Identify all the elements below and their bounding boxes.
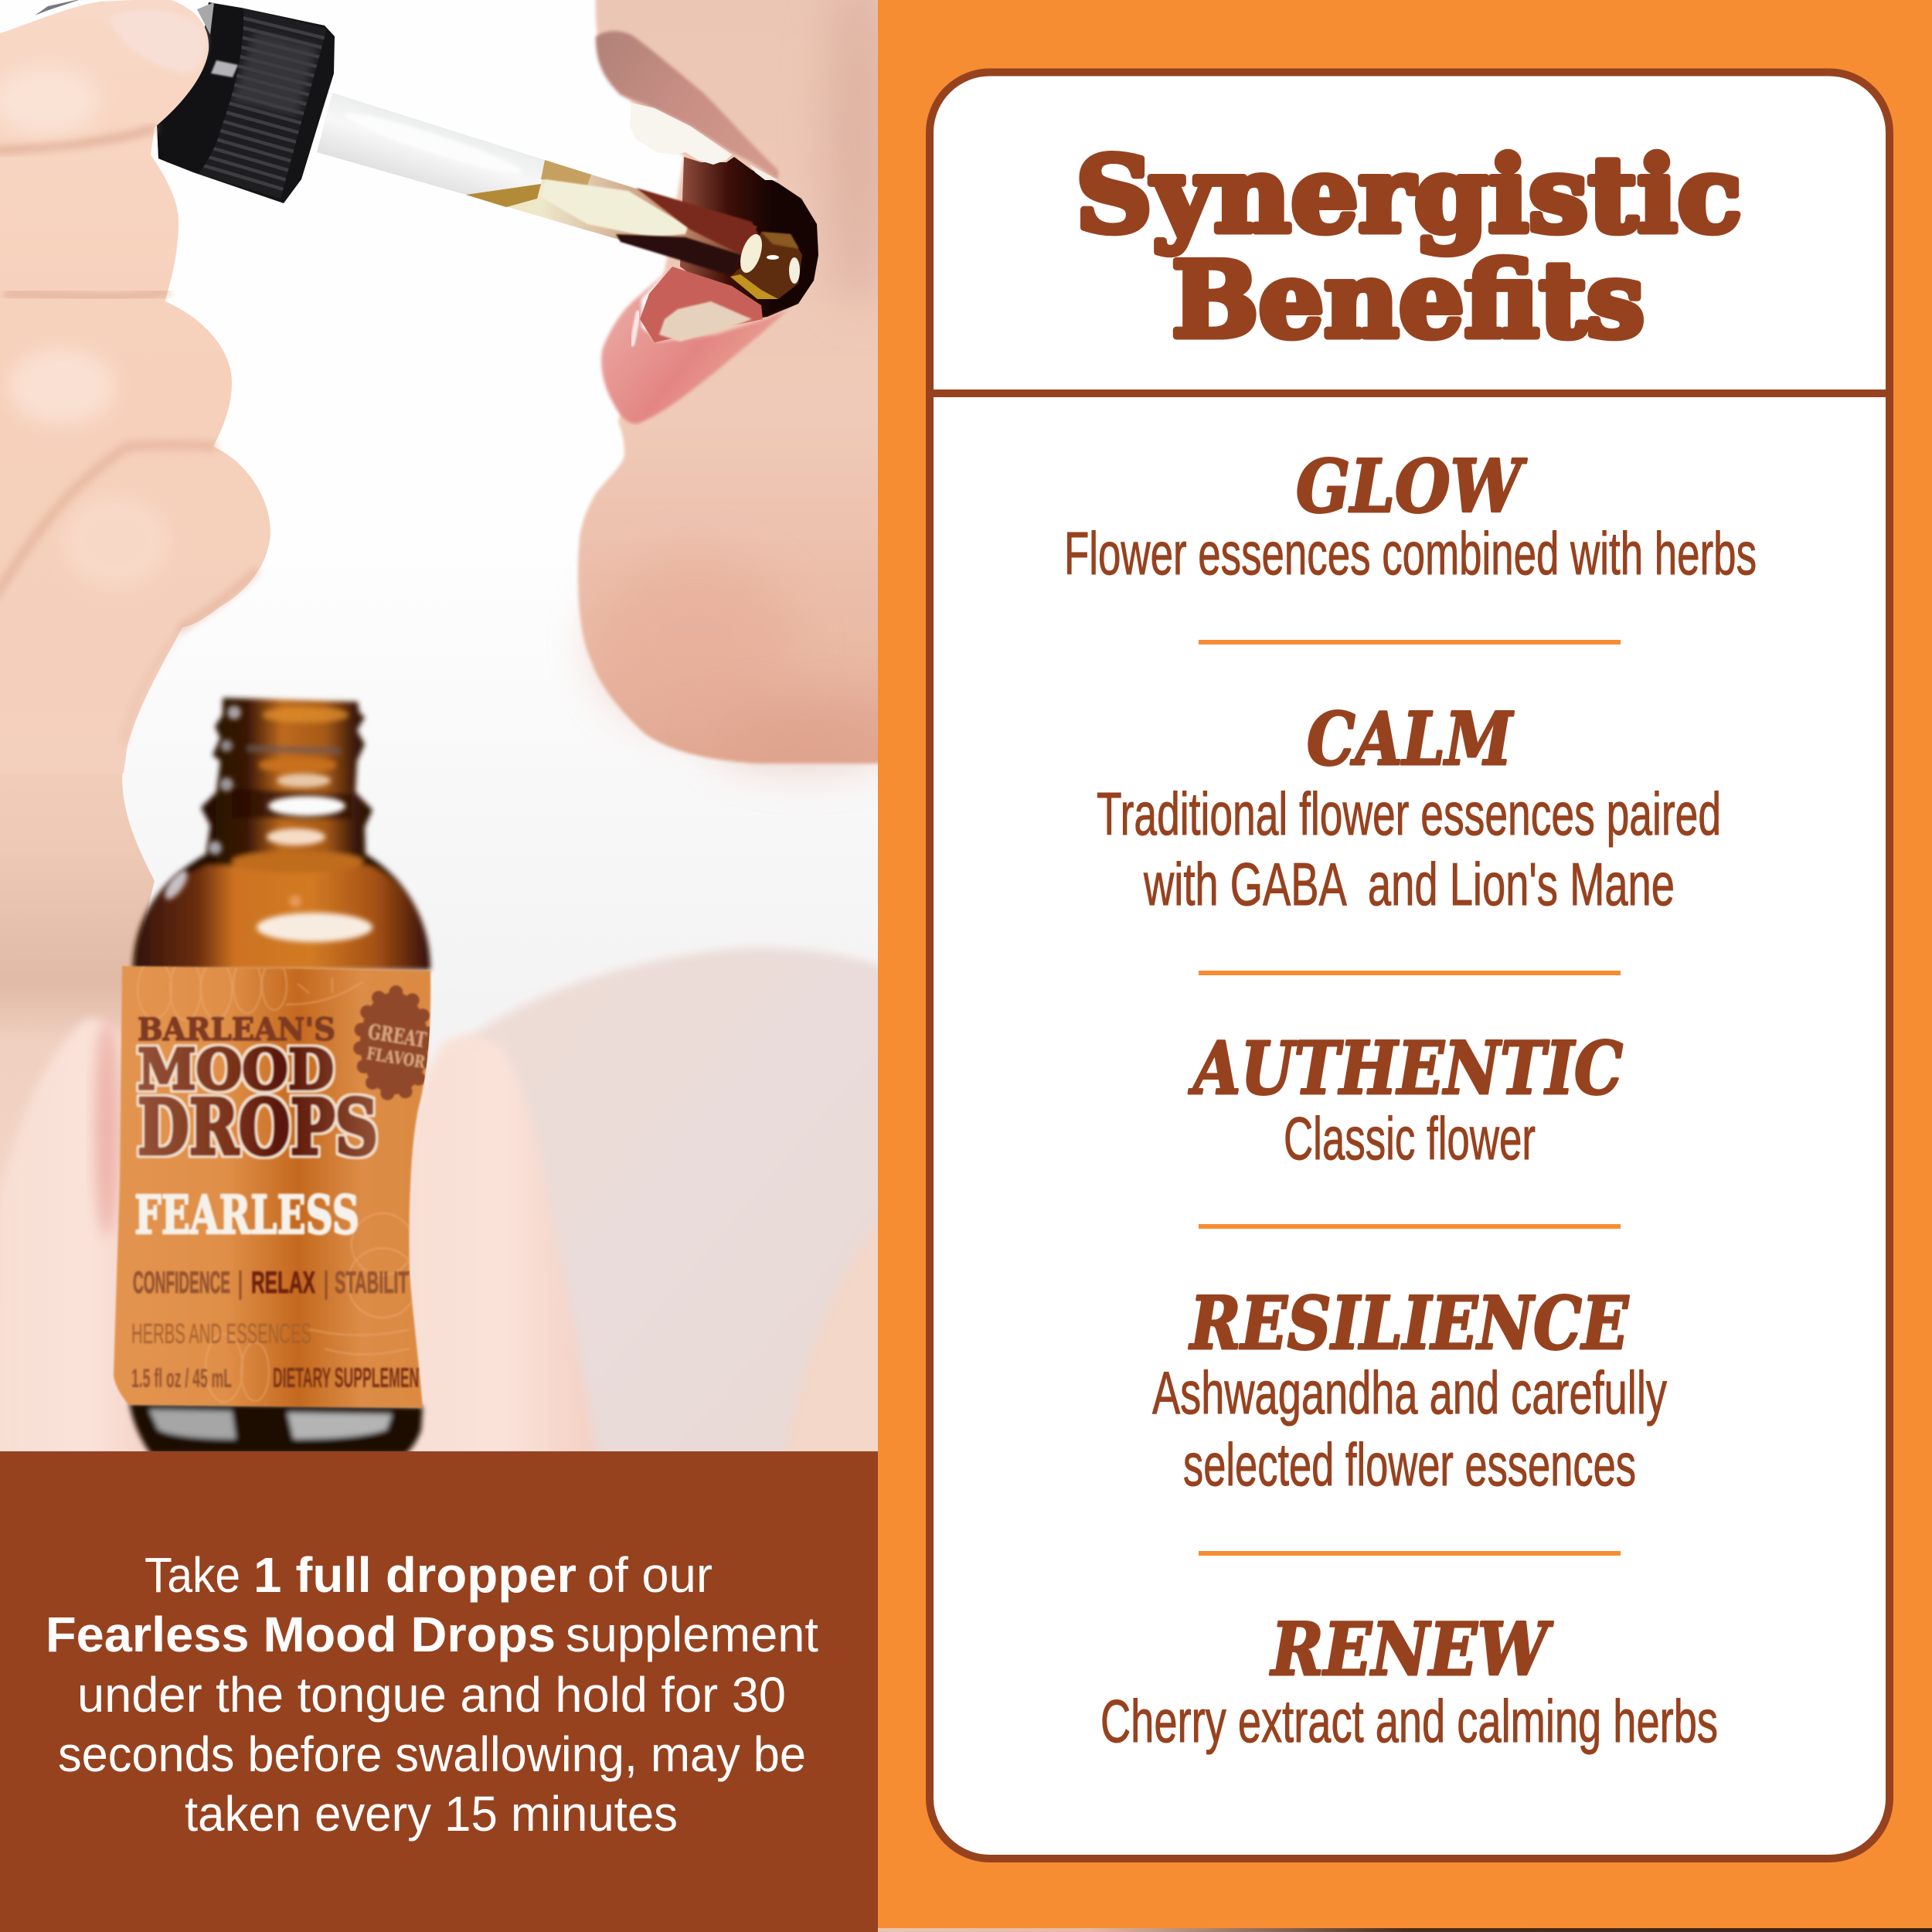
text block: directions: taken every 15 minutes [185,1786,678,1842]
benefit words: | [238,1266,243,1300]
dropper [157,2,802,299]
mouth interior [680,157,818,319]
benefit: authentic: AUTHENTIC [1188,1026,1623,1111]
text block: directions: Fearless Mood Drops [46,1607,556,1662]
benefit words: RELAX [251,1266,315,1300]
panel: product photo: DIETARY SUPPLEMENT [273,1362,427,1393]
panel: product photo [0,0,899,1478]
benefit: resilience [1152,1281,1667,1498]
finger highlights [0,66,100,135]
flavor: fearless: FEARLESS [134,1185,359,1247]
text block: directions: seconds before swallowing, may be [58,1726,806,1782]
finger shadows [0,123,261,657]
hand holding dropper [0,0,270,773]
herbs line: HERBS AND ESSENCES [131,1318,311,1349]
benefit: renew [1100,1607,1718,1755]
panel: directions background [0,1451,878,1932]
label leaf pattern [138,957,417,1402]
benefit words: CONFIDENCE [133,1266,230,1300]
oil highlight [541,179,688,237]
oil dark bands [636,188,760,255]
fingers holding bottle [0,1019,598,1478]
benefit: resilience: selected flower essences [1183,1430,1636,1498]
bottle base [129,1403,423,1454]
benefit: authentic [1188,1026,1623,1172]
bottle neck and shoulders [133,698,430,970]
benefit: calm [1097,697,1721,918]
text block: directions: supplement [566,1607,818,1662]
shoulder [473,945,878,1451]
heading: synergistic benefits: Benefits [1172,239,1645,361]
panel: benefits card [930,73,1889,1859]
benefit: glow [1064,444,1757,587]
thumb nail [108,9,206,73]
benefit: calm: with GABA and Lion's Mane [1143,850,1675,918]
dropper tip [730,232,802,299]
heading: synergistic benefits [1076,134,1742,361]
bottle highlights [161,706,372,942]
brand name: BARLEAN'S [138,1012,335,1048]
product name: drops: DROPS [138,1083,378,1172]
mouth [596,31,818,423]
heading: synergistic benefits: Synergistic [1076,134,1742,256]
benefit: renew: RENEW [1269,1607,1553,1692]
amber bottle [114,698,430,1454]
face with chin [578,0,896,765]
cap ribs [196,17,325,189]
text block: directions: Take [145,1547,240,1603]
panel: orange background [878,0,1932,1932]
size: 1.5 fl oz / 45 mL [131,1364,232,1393]
badge: great flavor [360,992,428,1094]
text block: directions: 1 full dropper [253,1547,577,1603]
text block: directions: under the tongue and hold for 30 [77,1667,786,1723]
glass tube, empty section [317,93,545,195]
benefit: resilience: Ashwagandha and carefully [1152,1359,1667,1427]
benefit words: STABILITY [335,1266,420,1300]
badge: great flavor: GREAT [366,1020,428,1053]
badge: great flavor: FLAVOR [366,1044,427,1073]
upper teeth [630,103,732,165]
lower teeth [659,301,752,342]
benefit words: | [324,1266,328,1300]
product name: mood: MOOD [138,1036,334,1102]
bottle label [114,966,430,1408]
benefit: authentic: Classic flower [1284,1104,1536,1172]
text block: directions [46,1547,818,1842]
wrist and palm [0,773,155,1451]
cap collar [157,2,243,174]
text block: directions: of our [587,1547,713,1603]
lower gum [640,267,763,342]
dropper cap [157,2,335,203]
upper lip [596,31,778,180]
benefit: calm: CALM [1307,697,1514,782]
lower lip [601,267,788,423]
glass tube, oil section [466,160,757,273]
benefit: glow: GLOW [1296,444,1527,529]
benefit: resilience: RESILIENCE [1188,1281,1629,1366]
